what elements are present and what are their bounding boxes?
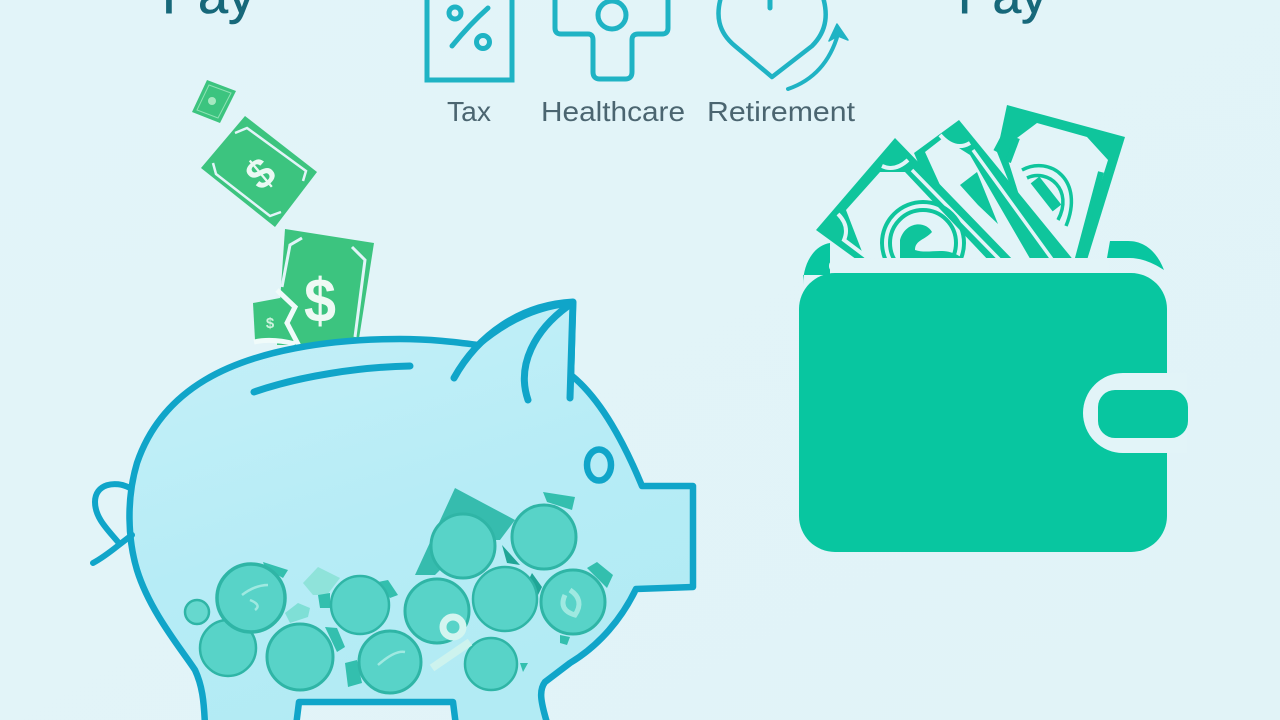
icon: large falling bill with torn corner: $ [304, 267, 336, 336]
pig body [129, 303, 693, 720]
icon: healthcare cross [555, 0, 668, 79]
label: Retirement: Retirement [707, 96, 855, 127]
wallet top slot [829, 259, 1109, 273]
icon: tax document [427, 0, 512, 80]
icon: small falling bill [192, 80, 236, 123]
coins [185, 505, 605, 693]
folded bill behind coins [415, 488, 515, 575]
wallet body [799, 273, 1167, 552]
pig eye [587, 450, 611, 480]
icon: large falling bill with torn corner: $ [266, 315, 275, 332]
icon: medium falling bill: $ [236, 148, 284, 199]
front banknote [816, 138, 1011, 258]
pig ear inner line [524, 306, 568, 400]
pig back highlight [254, 366, 410, 392]
label: Tax: Tax [447, 96, 491, 127]
icon: wallet with banknotes [799, 105, 1188, 552]
icon: retirement heart with arrow [718, 0, 848, 89]
icon: medium falling bill [201, 116, 317, 227]
banknotes [816, 105, 1125, 258]
pig ear front line [454, 302, 573, 398]
wallet clasp ring [1083, 373, 1187, 453]
icon: large falling bill with torn corner [253, 229, 374, 346]
pig tail [93, 484, 132, 563]
wallet clasp [1098, 390, 1188, 438]
label: Healthcare: Healthcare [541, 96, 685, 127]
coin and bill highlights [242, 585, 579, 668]
icon: piggy bank [93, 302, 693, 720]
coin tabs [263, 492, 613, 687]
middle banknote [914, 120, 1075, 262]
back banknote [997, 105, 1125, 262]
wallet back flap [803, 241, 1164, 285]
